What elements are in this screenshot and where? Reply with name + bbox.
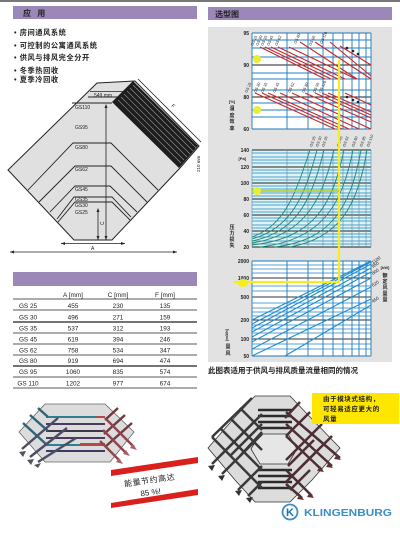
table text: 193 [160, 326, 171, 332]
size labels between charts: GS 25 [309, 136, 317, 147]
heading: selection chart: 选型图 [215, 9, 239, 19]
table text: 694 [113, 358, 124, 365]
dimension labels: A [91, 246, 95, 252]
model labels: GS 62 [287, 82, 295, 93]
panel: application [13, 6, 197, 84]
table text: 574 [160, 369, 171, 376]
axis title [224, 328, 231, 357]
size labels between charts [309, 134, 374, 147]
table text: C [mm] [108, 292, 129, 299]
chart: pressure loss [229, 148, 371, 251]
table text: 474 [160, 358, 171, 365]
axis numbers: 40 [243, 229, 249, 235]
table text: A [mm] [63, 292, 83, 299]
model labels: GS45 [75, 187, 88, 193]
right labels: 450 [371, 295, 380, 304]
callout: modular structure [312, 393, 399, 424]
table text: GS 62 [19, 348, 38, 354]
size labels between charts: GS 62 [342, 136, 350, 147]
table text [17, 292, 175, 388]
axis numbers: 80 [243, 95, 249, 101]
right axis title: 额 [382, 272, 388, 279]
axis title [229, 99, 236, 132]
model labels [75, 105, 90, 216]
axis numbers: 60 [243, 127, 249, 133]
table text: 977 [113, 380, 124, 388]
model labels: GS 25 [250, 35, 258, 46]
axis title: [%] [229, 99, 236, 104]
model labels: GS30 [75, 203, 88, 209]
table text: 271 [113, 314, 124, 322]
callout: energy saving: 85 %! [140, 487, 161, 498]
icon: cross-flow exchanger, large [208, 396, 341, 503]
table text: 347 [160, 348, 171, 354]
table text: GS 35 [19, 326, 38, 332]
dimension labels [91, 93, 201, 252]
axis title: 量 [225, 343, 231, 350]
panel: selection chart [208, 7, 392, 362]
right axis title: [kW] [381, 265, 390, 270]
axis numbers: 80 [243, 197, 249, 203]
axis numbers: 100 [241, 181, 249, 187]
logo: Klingenburg [282, 504, 392, 520]
axis title: [m3/h] [224, 328, 229, 341]
table text: GS 30 [19, 314, 38, 322]
model labels: GS 25 [244, 82, 252, 93]
right axis title: 量 [382, 296, 388, 303]
axis numbers: 100 [241, 337, 249, 343]
logo: Klingenburg: KLINGENBURG [304, 507, 392, 519]
dimension labels: 210 mm [196, 155, 201, 172]
size labels between charts: GS 80 [351, 136, 359, 147]
size labels between charts: GS 45 [336, 136, 344, 147]
model labels: GS 80 [301, 82, 309, 93]
axis numbers [243, 31, 249, 133]
axis numbers: 60 [243, 213, 249, 219]
bullet list [14, 28, 98, 84]
model labels: GS 35 [260, 35, 268, 46]
axis numbers [238, 148, 249, 251]
callout: modular structure: 风量 [323, 415, 337, 423]
dimension diagram [8, 79, 201, 254]
icon: cross-flow exchanger, small [19, 404, 137, 468]
table text: 394 [113, 336, 124, 344]
table text: 312 [113, 326, 124, 332]
callout: modular structure: 由于模块式结构， [323, 394, 380, 403]
axis title: 损 [229, 236, 235, 243]
axis title [229, 225, 235, 249]
selection guide lines [234, 55, 339, 287]
bullet list: • 冬季热回收 [14, 66, 59, 75]
axis title: 度 [229, 112, 235, 119]
axis title: 风 [225, 351, 231, 357]
right labels: 620 [371, 279, 380, 288]
bullet list: • 供风与排风完全分开 [14, 53, 90, 62]
chart: air volume [224, 255, 390, 360]
axis numbers: 90 [243, 63, 249, 69]
size labels between charts: GS 95 [359, 136, 367, 147]
heading: application: 应 用 [23, 8, 47, 18]
table text: 159 [160, 314, 171, 322]
right labels: 950 [371, 260, 380, 269]
dimension labels: C [100, 221, 106, 225]
heading: application [13, 6, 197, 19]
model labels: GS 62 [274, 35, 282, 46]
axis numbers: 140 [241, 148, 249, 154]
size labels between charts: GS 35 [321, 136, 329, 147]
model labels: GS 45 [266, 35, 274, 46]
callout: energy saving [111, 457, 198, 508]
heading: selection chart [208, 7, 392, 20]
model labels: GS62 [75, 167, 88, 173]
axis title: 率 [229, 125, 235, 132]
model labels [244, 31, 328, 93]
model labels: GS 110 [319, 31, 328, 44]
axis numbers: 2000 [238, 259, 249, 265]
table text: GS 110 [17, 380, 39, 388]
table text: GS 80 [19, 358, 38, 365]
table text: 246 [160, 336, 171, 344]
axis numbers: 120 [241, 165, 249, 171]
dimension arrows [10, 92, 177, 254]
table text: 455 [68, 303, 79, 310]
model labels: GS 95 [308, 35, 316, 46]
table text: GS 25 [19, 303, 38, 310]
model labels: GS35 [75, 197, 88, 203]
logo: Klingenburg: K [286, 507, 294, 519]
axis numbers: 20 [243, 245, 249, 251]
bullet list: • 夏季冷回收 [14, 75, 59, 84]
model labels: GS 35 [260, 82, 268, 93]
dimension labels: F [170, 103, 176, 110]
right axis title: 风 [382, 285, 388, 291]
right axis title: 定 [382, 278, 388, 285]
panel: dimensions table [13, 272, 197, 388]
caption: 此图表适用于供风与排风质量流量相同的情况 [208, 365, 358, 375]
axis numbers [238, 259, 249, 360]
axis numbers: 500 [241, 295, 249, 301]
table rules [13, 299, 197, 388]
model labels: GS 45 [272, 82, 280, 93]
right labels: 800 [371, 267, 380, 276]
table text: 534 [113, 348, 124, 354]
dimension labels: 549 mm [94, 93, 112, 99]
axis numbers: 95 [243, 31, 249, 37]
model labels: GS 110 [318, 80, 327, 93]
axis numbers: 200 [241, 318, 249, 324]
table text: 537 [68, 326, 79, 332]
bullet list: • 房间通风系统 [14, 28, 66, 37]
table text: 1060 [66, 369, 81, 376]
model labels: GS 30 [253, 82, 261, 93]
table text: 835 [113, 369, 124, 376]
axis title: 压 [229, 225, 235, 231]
table text: 230 [113, 303, 124, 310]
axis title: 温 [229, 105, 235, 112]
table text: GS 45 [19, 336, 38, 344]
axis numbers: [Pa] [238, 156, 247, 161]
model labels: GS25 [75, 210, 88, 216]
model labels: GS95 [75, 125, 88, 131]
axis title: 力 [229, 230, 235, 237]
table text: 1202 [66, 380, 81, 388]
heat exchanger block [112, 79, 201, 168]
axis numbers: 50 [243, 354, 249, 360]
table text: 919 [68, 358, 79, 365]
bullet list: • 可控制的公寓通风系统 [14, 41, 98, 50]
table text: F [mm] [155, 292, 175, 299]
callout: energy saving: 能量节约高达 [123, 471, 176, 489]
model labels: GS110 [75, 105, 90, 111]
table text: GS 95 [19, 369, 38, 376]
axis title: 失 [229, 242, 235, 249]
table text: 496 [68, 314, 79, 322]
axis title: 效 [229, 118, 235, 125]
right axis title: 量 [382, 290, 388, 297]
axis numbers: 1000 [238, 276, 249, 282]
table text: 619 [68, 336, 79, 344]
size labels between charts: GS 110 [366, 134, 374, 147]
table text: 758 [68, 348, 79, 354]
model labels: GS 95 [312, 82, 320, 93]
callout: modular structure: 可轻易适应更大的 [323, 404, 380, 413]
right labels: 1100 [371, 255, 382, 265]
right labels [371, 255, 382, 304]
size labels between charts: GS 30 [315, 136, 323, 147]
table text: 674 [160, 380, 171, 388]
model labels: GS80 [75, 145, 88, 151]
chart: temperature efficiency [229, 31, 371, 133]
model labels: GS 30 [255, 35, 263, 46]
right axis title [381, 265, 390, 303]
model labels: GS 80 [293, 33, 301, 44]
table text: 135 [160, 303, 171, 310]
